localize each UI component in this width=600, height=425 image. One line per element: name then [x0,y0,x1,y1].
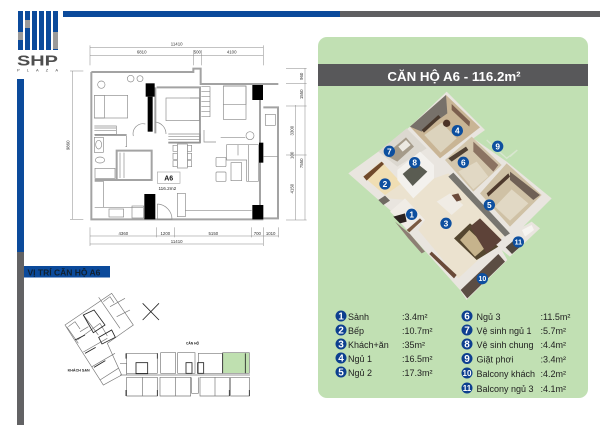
unit label [157,172,180,191]
unit label: A6 [164,175,173,182]
room number markers [379,125,524,284]
legend: right column: :4.4m² [540,340,566,350]
legend: left column: :35m² [402,340,425,350]
balcony 10 [461,254,505,298]
entry lobby [390,198,425,232]
compass [143,303,159,320]
room number markers: 11 [515,239,522,246]
room number markers: 1 [409,209,414,219]
sofa [470,218,502,253]
panel title: CĂN HỘ A6 - 116.2m² [387,69,521,84]
legend: right column: 9 [464,354,470,365]
logo: SHP Plaza: PLAZA [17,68,58,72]
legend: right column: Giặt phơi [476,354,513,364]
logo: SHP Plaza [17,11,58,72]
bathroom 7 [378,128,427,167]
apartment wing [120,353,250,396]
bedroom 2 [480,163,542,227]
legend: left column: 5 [338,368,344,378]
dimension labels: 4150 [289,183,294,193]
legend: right column: Balcony ngủ 3 [476,384,534,394]
3D apartment view [348,92,552,300]
legend: left column: Ngủ 2 [348,368,372,378]
legend: right column: 10 [463,369,472,378]
legend: right column: 11 [463,384,472,393]
dimension labels: 4360 [119,231,129,236]
room number markers: 10 [478,276,486,283]
room number markers: 3 [444,218,449,228]
legend: right column: :3.4m² [540,354,566,364]
legend: right column: Vệ sinh ngủ 1 [476,326,532,336]
bedroom 1 [410,95,480,158]
legend: right column: 7 [464,326,470,336]
bedroom 3 [445,137,502,192]
legend: left column: Sảnh [348,312,369,322]
room number markers: 5 [487,200,492,210]
kitchen [363,162,402,195]
furniture [94,75,278,219]
panel title [318,64,588,86]
dining [437,193,463,215]
dimension labels: 100 [289,151,294,159]
outer wall accent [395,222,425,253]
dimension labels: 7550 [299,158,304,168]
heading: location: VỊ TRÍ CĂN HỘ A6 [28,266,101,277]
bathroom 8 [397,152,434,198]
highlighted unit [223,353,249,373]
dimension labels: 1550 [299,89,304,99]
dimension labels: 500 [194,50,202,55]
dimension labels: 960 [299,72,304,80]
dimension labels: 3300 [289,125,294,135]
dimension labels: 11410 [171,239,183,244]
legend: left column: Ngủ 1 [348,354,372,364]
balcony 11 [506,237,524,254]
legend: right column: :4.1m² [540,384,566,394]
dimension labels: 4100 [227,50,237,55]
legend: right column [462,310,570,394]
laundry 9 [487,140,517,158]
living floor [367,162,507,278]
legend: left column: Bếp [348,326,364,336]
dimension labels: 6810 [137,50,147,55]
dimension labels: 11410 [171,41,183,46]
legend: right column: :5.7m² [540,326,566,336]
dimension labels: 1200 [161,231,171,236]
walls [91,69,278,219]
cabinet [429,252,457,278]
room number markers: 8 [412,158,417,168]
legend: right column: :4.2m² [540,369,566,379]
legend: left column: 4 [338,354,344,364]
wing labels: CĂN HỘ [186,340,200,345]
top bar [63,11,600,17]
room number markers: 2 [383,179,388,189]
wing labels [68,340,200,372]
legend: left column: 1 [338,312,344,322]
rug [454,223,498,260]
left side bar [17,79,24,425]
legend: left column: :10.7m² [402,326,433,336]
legend: right column: 6 [464,312,470,322]
wing labels: KHÁCH SẠN [68,367,90,372]
panel: apartment details [318,37,588,398]
outer shell [348,92,552,300]
dimension labels: 9860 [65,140,70,150]
key plan [65,293,250,396]
hotel wing [65,293,133,385]
dividing wall [448,173,510,237]
room number markers: 6 [461,157,466,167]
legend: left column [336,310,433,378]
legend: left column: :17.3m² [402,368,433,378]
dimension labels [65,41,304,244]
room number markers: 4 [455,126,460,136]
legend: right column: Ngủ 3 [476,312,501,322]
legend: right column: Vệ sinh chung [476,340,534,350]
floor plan A6 [65,41,307,246]
unit label: 116.2m2 [158,186,177,191]
room number markers: 7 [387,146,392,156]
legend: left column: 2 [338,326,344,336]
logo: SHP Plaza: SHP [17,54,58,70]
legend: left column: :16.5m² [402,354,433,364]
legend: left column: Khách+ăn [348,340,389,350]
room number markers: 9 [495,141,500,151]
columns [144,83,263,219]
dimension labels: 5150 [209,231,219,236]
dimension labels: 1010 [266,231,276,236]
legend: left column: 3 [338,340,344,350]
legend: right column: 8 [464,340,470,350]
legend: left column: :3.4m² [402,312,428,322]
legend: right column: Balcony khách [476,369,535,379]
legend: right column: :11.5m² [540,312,570,322]
dimension labels: 700 [254,231,262,236]
dimension lines [70,45,307,246]
